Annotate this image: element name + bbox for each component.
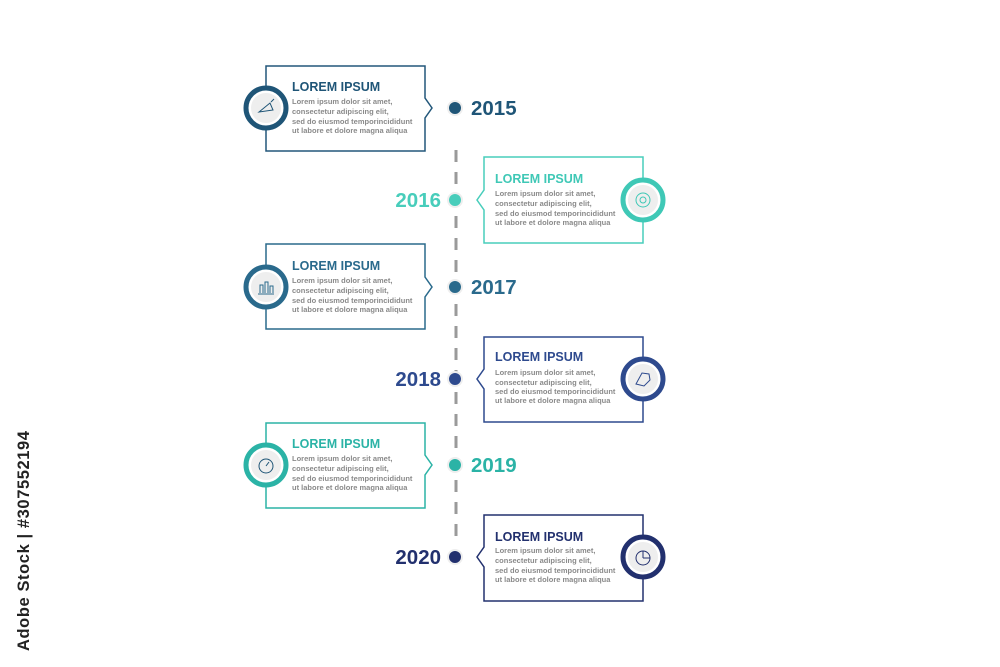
item 2019: Lorem ipsum dolor sit amet, (292, 454, 392, 463)
item 2016 (395, 157, 663, 243)
item 2020: consectetur adipiscing elit, (495, 556, 592, 565)
item 2020 (395, 515, 663, 601)
item 2016: sed do eiusmod temporincididunt (495, 209, 616, 218)
item 2016: 2016 (395, 189, 441, 212)
item 2017: sed do eiusmod temporincididunt (292, 296, 413, 305)
item 2015: Lorem ipsum dolor sit amet, (292, 97, 392, 106)
item 2019: sed do eiusmod temporincididunt (292, 474, 413, 483)
item 2020: Lorem ipsum dolor sit amet, (495, 546, 595, 555)
item 2015: sed do eiusmod temporincididunt (292, 117, 413, 126)
item 2016: consectetur adipiscing elit, (495, 199, 592, 208)
item 2017: ut labore et dolore magna aliqua (292, 305, 408, 314)
item 2019: LOREM IPSUM (292, 437, 380, 451)
item 2015: LOREM IPSUM (292, 80, 380, 94)
item 2015: 2015 (471, 97, 517, 120)
item 2016: LOREM IPSUM (495, 172, 583, 186)
item 2019: 2019 (471, 454, 517, 477)
item 2019 (246, 423, 517, 508)
item 2020: ut labore et dolore magna aliqua (495, 575, 611, 584)
item 2017: consectetur adipiscing elit, (292, 286, 389, 295)
item 2020: sed do eiusmod temporincididunt (495, 566, 616, 575)
item 2018: sed do eiusmod temporincididunt (495, 387, 616, 396)
item 2018: LOREM IPSUM (495, 350, 583, 364)
item 2018: consectetur adipiscing elit, (495, 378, 592, 387)
item 2018 (395, 337, 663, 422)
item 2018: 2018 (395, 368, 441, 391)
item 2019: ut labore et dolore magna aliqua (292, 483, 408, 492)
item 2017: LOREM IPSUM (292, 259, 380, 273)
item 2017: 2017 (471, 276, 517, 299)
timeline dashed line (454, 150, 458, 545)
item 2017 (246, 244, 517, 329)
watermark side text: Adobe Stock | #307552194 (15, 430, 33, 651)
item 2017: Lorem ipsum dolor sit amet, (292, 276, 392, 285)
item 2020: LOREM IPSUM (495, 530, 583, 544)
item 2016: ut labore et dolore magna aliqua (495, 218, 611, 227)
item 2018: ut labore et dolore magna aliqua (495, 396, 611, 405)
item 2016: Lorem ipsum dolor sit amet, (495, 189, 595, 198)
item 2020: 2020 (395, 546, 441, 569)
item 2015: consectetur adipiscing elit, (292, 107, 389, 116)
item 2015: ut labore et dolore magna aliqua (292, 126, 408, 135)
item 2015 (246, 66, 517, 151)
item 2018: Lorem ipsum dolor sit amet, (495, 368, 595, 377)
item 2019: consectetur adipiscing elit, (292, 464, 389, 473)
